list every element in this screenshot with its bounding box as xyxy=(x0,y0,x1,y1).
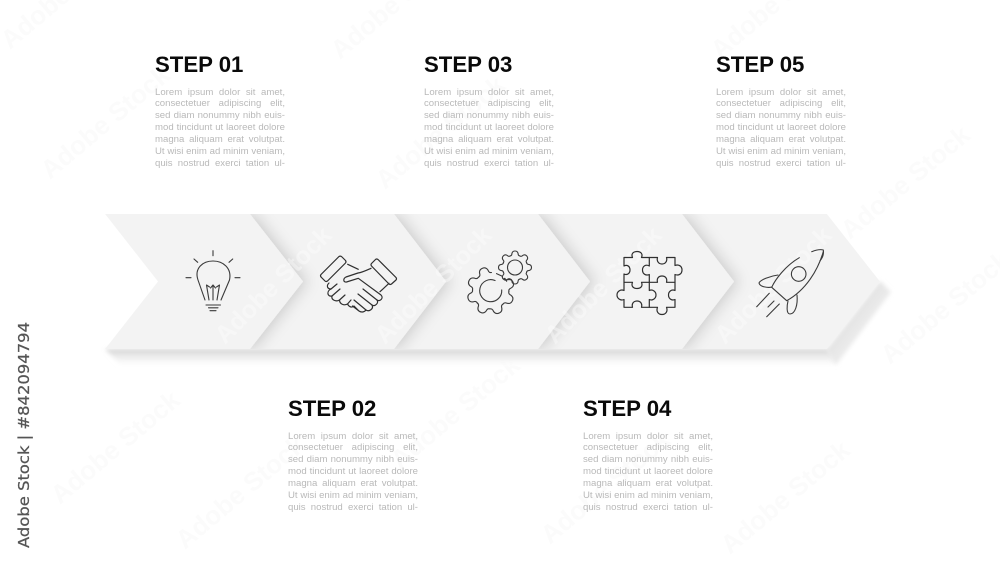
body text: step 05: consectetuer adipiscing elit, xyxy=(716,98,846,109)
step 03 text block xyxy=(424,52,554,169)
body text: step 02: Ut wisi enim ad minim veniam, xyxy=(288,490,418,501)
body text: step 01: magna aliquam erat volutpat. xyxy=(155,134,285,145)
body text: step 04: consectetuer adipiscing elit, xyxy=(583,442,713,453)
large gear xyxy=(466,266,516,316)
body text: step 01: sed diam nonummy nibh euis- xyxy=(155,110,285,121)
heading: step 02: STEP 02 xyxy=(288,396,376,421)
body text: step 03: mod tincidunt ut laoreet dolore xyxy=(424,122,554,133)
body text: step 03: magna aliquam erat volutpat. xyxy=(424,134,554,145)
watermark on background: Adobe Stock xyxy=(370,69,511,195)
watermark on band: Adobe Stock xyxy=(539,221,667,349)
icon: puzzle xyxy=(617,252,682,314)
body text: step 03: Ut wisi enim ad minim veniam, xyxy=(424,146,554,157)
watermark on background: Adobe Stock xyxy=(715,434,856,560)
body text: step 01 xyxy=(155,86,285,169)
step 01 text block xyxy=(155,52,285,169)
watermark on band: Adobe Stock xyxy=(209,221,337,349)
chevron 2 xyxy=(247,214,446,349)
body text: step 04: Lorem ipsum dolor sit amet, xyxy=(583,430,713,442)
small gear xyxy=(498,251,532,284)
icon: rocket xyxy=(757,250,823,317)
band under shadow xyxy=(105,281,891,365)
body text: step 03: consectetuer adipiscing elit, xyxy=(424,98,554,109)
body text: step 02: Lorem ipsum dolor sit amet, xyxy=(288,430,418,442)
body text: step 04: magna aliquam erat volutpat. xyxy=(583,478,713,489)
chevron arrow band with icons xyxy=(17,214,890,548)
body text: step 03: quis nostrud exerci tation ul- xyxy=(424,158,554,169)
watermark on band xyxy=(288,258,590,340)
body text: step 01: consectetuer adipiscing elit, xyxy=(155,98,285,109)
five chevron segments xyxy=(105,214,880,349)
body text: step 02: mod tincidunt ut laoreet dolore xyxy=(288,466,418,477)
heading: step 01: STEP 01 xyxy=(155,52,243,77)
watermark on background: Adobe Stock xyxy=(385,349,526,475)
step 04 text block xyxy=(583,396,713,513)
body text: step 02: quis nostrud exerci tation ul- xyxy=(288,502,418,513)
body text: step 01: quis nostrud exerci tation ul- xyxy=(155,158,285,169)
step 05 text block xyxy=(716,52,846,169)
chevron 3 xyxy=(391,214,590,349)
watermark on background: Adobe Stock xyxy=(535,424,676,550)
body text: step 05: Ut wisi enim ad minim veniam, xyxy=(716,146,846,157)
body text: step 05: quis nostrud exerci tation ul- xyxy=(716,158,846,169)
body text: step 02: magna aliquam erat volutpat. xyxy=(288,478,418,489)
body text: step 05: magna aliquam erat volutpat. xyxy=(716,134,846,145)
body text: step 04: quis nostrud exerci tation ul- xyxy=(583,502,713,513)
icon: handshake xyxy=(320,256,396,312)
body text: step 04 xyxy=(583,430,713,513)
body text: step 04: sed diam nonummy nibh euis- xyxy=(583,454,713,465)
chevron 5 xyxy=(680,214,880,349)
body text: step 03: sed diam nonummy nibh euis- xyxy=(424,110,554,121)
watermark on band: Adobe Stock xyxy=(709,221,837,349)
body text: step 05: sed diam nonummy nibh euis- xyxy=(716,110,846,121)
body text: step 02 xyxy=(288,430,418,513)
watermark on background: Adobe Stock xyxy=(35,59,176,185)
heading: step 03: STEP 03 xyxy=(424,52,512,77)
body text: step 01: Ut wisi enim ad minim veniam, xyxy=(155,146,285,157)
chevron 4 xyxy=(535,214,734,349)
body text: step 01: mod tincidunt ut laoreet dolore xyxy=(155,122,285,133)
heading: step 05: STEP 05 xyxy=(716,52,804,77)
body text: step 04: Ut wisi enim ad minim veniam, xyxy=(583,490,713,501)
watermark on background: Adobe Stock xyxy=(45,384,186,510)
icon: gears xyxy=(466,251,532,316)
watermark on background: Adobe Stock xyxy=(170,429,311,555)
body text: step 02: consectetuer adipiscing elit, xyxy=(288,442,418,453)
watermark on band: Adobe Stock xyxy=(369,221,497,349)
body text: step 03: Lorem ipsum dolor sit amet, xyxy=(424,86,554,98)
body text: step 02: sed diam nonummy nibh euis- xyxy=(288,454,418,465)
body text: step 01: Lorem ipsum dolor sit amet, xyxy=(155,86,285,98)
body text: step 04: mod tincidunt ut laoreet dolore xyxy=(583,466,713,477)
body text: step 05: Lorem ipsum dolor sit amet, xyxy=(716,86,846,98)
heading: step 04: STEP 04 xyxy=(583,396,671,421)
stock id text: Adobe Stock | #842094794 xyxy=(15,322,33,548)
body text: step 05 xyxy=(716,86,846,169)
icon: light bulb xyxy=(186,251,240,311)
body text: step 05: mod tincidunt ut laoreet dolore xyxy=(716,122,846,133)
chevron 1 xyxy=(105,214,303,349)
watermark on background: Adobe Stock xyxy=(835,119,976,245)
body text: step 03 xyxy=(424,86,554,169)
step 02 text block xyxy=(288,396,418,513)
